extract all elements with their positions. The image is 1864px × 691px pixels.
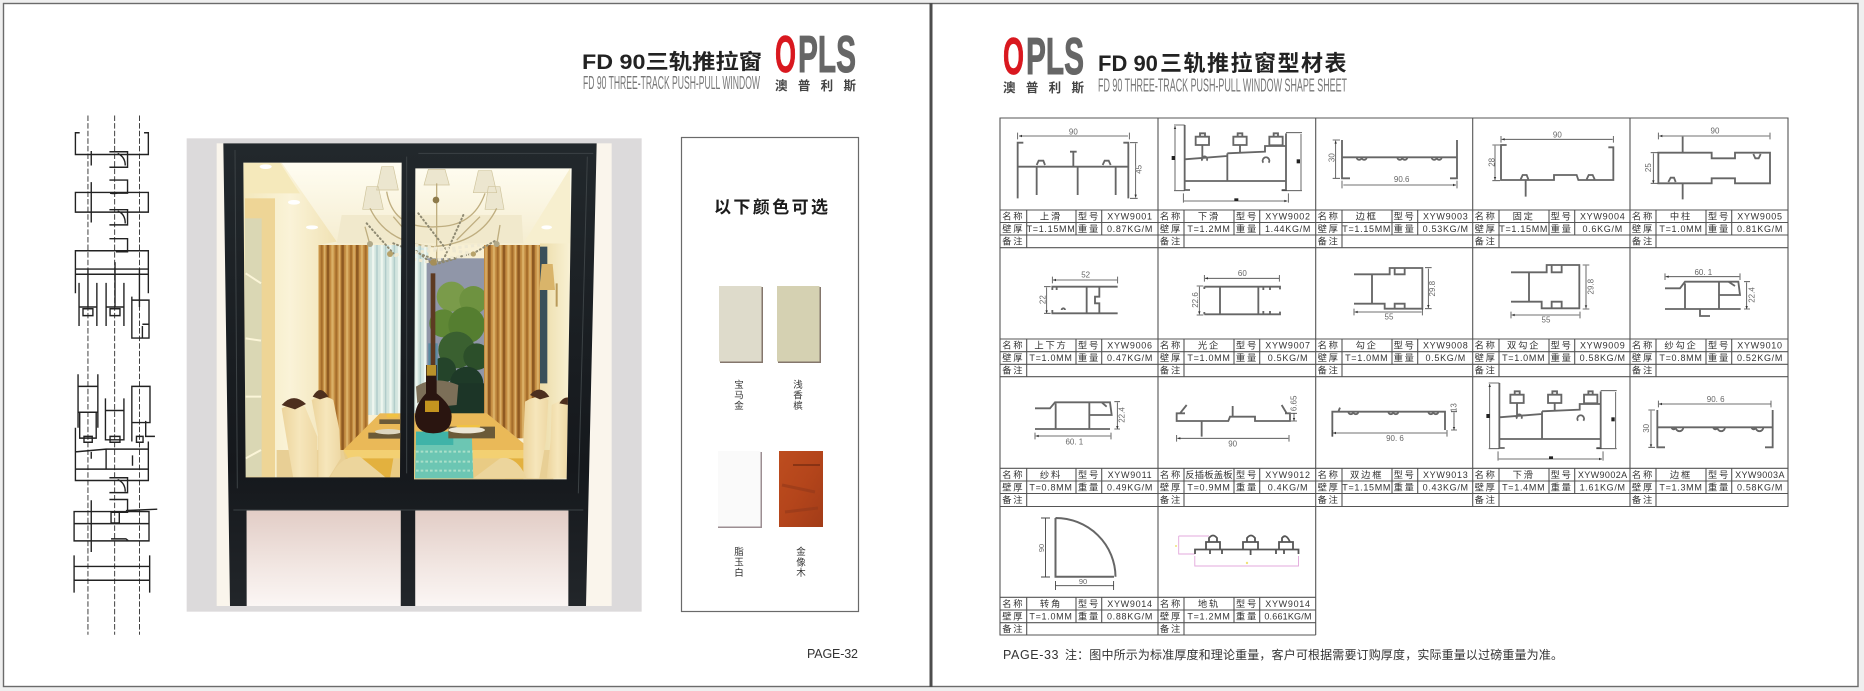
profile info: XYW9008: 壁厚 [1318, 352, 1340, 363]
profile info: XYW9012: 0.4KG/M [1268, 482, 1308, 492]
logo: OPLS right page: 澳普利斯 [1003, 80, 1084, 95]
profile info: XYW9003: 重量 [1394, 223, 1416, 234]
profile info: XYW9007: 重量 [1236, 352, 1258, 363]
logo: OPLS right page: O [1003, 28, 1024, 86]
profile drawing: XYW9007 [1191, 269, 1280, 315]
profile info: XYW9011: 壁厚 [1002, 481, 1024, 492]
profile info: XYW9005: T=1.0MM [1659, 224, 1703, 234]
profile info: XYW9001: 型号 [1078, 212, 1100, 222]
logo: OPLS left page: PLS [798, 26, 856, 84]
swatch: 浅香槟: 浅 [793, 379, 803, 391]
profile info: XYW9009: 双勾企 [1507, 340, 1540, 350]
profile info: XYW9006: 0.47KG/M [1107, 353, 1153, 363]
profile drawing: XYW9014 floor rail [1175, 536, 1298, 566]
profile info: XYW9014 floor rail: 0.661KG/M [1264, 611, 1312, 621]
profile info: XYW9014 floor rail: 名称 [1160, 598, 1182, 609]
swatch: 脂玉白: 白 [734, 567, 744, 579]
profile info: XYW9011: 纱料 [1040, 469, 1062, 480]
swatch: 金像木 [779, 451, 823, 579]
profile drawing: XYW9003A [1642, 395, 1773, 447]
profile info: XYW9011: T=0.8MM [1029, 482, 1073, 492]
profile info: XYW9002A: 型号 [1551, 470, 1573, 480]
profile info: XYW9008: 勾企 [1356, 340, 1378, 350]
swatch: 宝马金: 马 [734, 390, 744, 402]
profile drawing: XYW9008: 29.8 [1428, 280, 1437, 296]
profile info: XYW9006: 名称 [1002, 340, 1024, 350]
profile info: XYW9014 floor rail: 型号 [1236, 599, 1258, 609]
profile info: XYW9014 corner: 型号 [1078, 599, 1100, 609]
profile info: XYW9009: 0.58KG/M [1580, 353, 1626, 363]
logo: OPLS right page [1003, 28, 1084, 95]
profile info: XYW9007: T=1.0MM [1187, 353, 1231, 363]
profile info: XYW9013: 重量 [1394, 481, 1416, 492]
photo backdrop [187, 138, 642, 612]
profile drawing: XYW9005: 25 [1644, 163, 1653, 172]
profile info: XYW9014 corner: 0.88KG/M [1107, 611, 1153, 621]
profile info: XYW9005: 型号 [1708, 212, 1730, 222]
profile info: XYW9010: 备注 [1632, 364, 1654, 376]
profile info: XYW9005: 0.81KG/M [1737, 224, 1783, 234]
swatch: 浅香槟 [777, 286, 821, 412]
profile info: XYW9001 [1002, 210, 1153, 246]
profile info: XYW9002 [1160, 210, 1311, 246]
profile drawing: XYW9014 corner [1037, 518, 1116, 590]
swatch: 金像木: 像 [796, 556, 806, 568]
swatch: 脂玉白 [718, 451, 762, 579]
profile info: XYW9006: T=1.0MM [1029, 353, 1073, 363]
profile info: XYW9008: XYW9008 [1423, 340, 1468, 350]
profile drawing: XYW9013 [1332, 403, 1459, 443]
profile info: XYW9009: 重量 [1551, 352, 1573, 363]
window photo [187, 138, 642, 612]
profile info: XYW9011: XYW9011 [1108, 470, 1152, 480]
profile info: XYW9013: XYW9013 [1423, 470, 1468, 480]
profile drawing: XYW9006: 22 [1039, 295, 1048, 304]
chairs [282, 405, 317, 478]
profile drawing: XYW9006 [1039, 271, 1118, 313]
profile info: XYW9001: 上滑 [1040, 212, 1062, 222]
profile info: XYW9003A: XYW9003A [1735, 470, 1785, 480]
profile info: XYW9014 floor rail [1160, 598, 1312, 634]
profile info: XYW9005: 中柱 [1670, 210, 1692, 222]
profile info: XYW9002A [1475, 469, 1628, 505]
profile info: XYW9003: 型号 [1394, 212, 1416, 222]
swatch: 浅香槟: 槟 [793, 400, 803, 412]
logo: OPLS right page: PLS [1026, 28, 1084, 86]
spandrel panels [247, 511, 401, 606]
profile info: XYW9003: 备注 [1318, 236, 1340, 246]
title: FD 90三轨推拉窗 [582, 50, 762, 74]
profile info: XYW9004: 重量 [1551, 223, 1573, 234]
profile drawing: XYW9002A [1486, 383, 1617, 461]
profile drawing: XYW9008 [1354, 268, 1437, 321]
profile drawing: XYW9004: 28 [1487, 157, 1496, 167]
profile drawing: XYW9002 [1172, 125, 1302, 203]
profile info: XYW9002A: 名称 [1475, 469, 1497, 480]
swatch: 宝马金: 金 [734, 400, 744, 412]
profile info: XYW9011: 0.49KG/M [1107, 482, 1153, 492]
profile info: XYW9006: 备注 [1002, 364, 1024, 376]
window frame [223, 143, 597, 606]
profile info: XYW9001: T=1.15MM [1027, 224, 1075, 234]
profile info: XYW9002A: 备注 [1475, 494, 1497, 505]
profile info: XYW9014 floor rail: T=1.2MM [1187, 611, 1231, 621]
profile info: XYW9009 [1475, 340, 1626, 376]
profile drawing: XYW9013: 90. 6 [1386, 434, 1404, 443]
profile info: XYW9011: 备注 [1002, 494, 1024, 505]
profile drawing: XYW9001 [1018, 128, 1144, 198]
logo: OPLS left page: O [775, 26, 796, 84]
profile info: XYW9013: 双边框 [1350, 469, 1383, 480]
profile info: XYW9003A: 0.58KG/M [1737, 482, 1783, 492]
profile info: XYW9002: 1.44KG/M [1265, 224, 1311, 234]
left page header [582, 50, 762, 93]
profile info: XYW9014 corner: 名称 [1002, 598, 1024, 609]
profile info: XYW9012: 重量 [1236, 481, 1258, 492]
profile info: XYW9011 [1002, 469, 1153, 505]
logo: OPLS left page [775, 26, 856, 93]
profile info: XYW9002: 下滑 [1198, 212, 1220, 222]
profile info: XYW9005 [1632, 210, 1783, 246]
profile info: XYW9002: 名称 [1160, 210, 1182, 222]
colour heading: 以下颜色可选 [714, 197, 830, 217]
profile drawing: XYW9001: 90 [1069, 128, 1078, 137]
profile info: XYW9010: 0.52KG/M [1737, 353, 1783, 363]
profile info: XYW9002A: 1.61KG/M [1580, 482, 1626, 492]
profile info: XYW9004: 名称 [1475, 210, 1497, 222]
profile info: XYW9003A: 壁厚 [1632, 481, 1654, 492]
profile info: XYW9010: 壁厚 [1632, 352, 1654, 363]
profile info: XYW9008: 备注 [1318, 364, 1340, 376]
profile info: XYW9014 floor rail: 备注 [1160, 623, 1182, 634]
profile info: XYW9002: 型号 [1236, 212, 1258, 222]
profile info: XYW9003A: T=1.3MM [1659, 482, 1703, 492]
profile info: XYW9008: 型号 [1394, 340, 1416, 350]
profile info: XYW9002: 重量 [1236, 223, 1258, 234]
profile info: XYW9008: 0.5KG/M [1425, 353, 1466, 363]
profile drawing: XYW9003A: 90. 6 [1707, 395, 1725, 404]
profile info: XYW9004: XYW9004 [1580, 212, 1625, 222]
profile info: XYW9013: 壁厚 [1318, 481, 1340, 492]
profile info: XYW9014 floor rail: XYW9014 [1265, 599, 1311, 609]
profile drawing: XYW9005 [1644, 126, 1770, 199]
profile info: XYW9005: 名称 [1632, 210, 1654, 222]
profile info: XYW9010: 重量 [1708, 352, 1730, 363]
panel: colour options [682, 138, 858, 612]
profile info: XYW9002A: 壁厚 [1475, 481, 1497, 492]
profile info: XYW9005: 备注 [1632, 236, 1654, 246]
profile info: XYW9011: 名称 [1002, 469, 1024, 480]
flowers and wine bottle [416, 380, 458, 407]
profile info: XYW9005: 壁厚 [1632, 223, 1654, 234]
profile info: XYW9009: T=1.0MM [1502, 353, 1545, 363]
profile drawing: XYW9013: 13 [1450, 403, 1459, 412]
profile info: XYW9012: T=0.9MM [1187, 482, 1231, 492]
profile info: XYW9010 [1632, 340, 1783, 376]
profile info: XYW9010: T=0.8MM [1659, 353, 1703, 363]
profile info: XYW9004: T=1.15MM [1499, 224, 1548, 234]
profile info: XYW9006: 上下方 [1034, 340, 1068, 350]
profile info: XYW9014 floor rail: 重量 [1236, 610, 1258, 621]
profile info: XYW9006: XYW9006 [1107, 340, 1153, 350]
profile info: XYW9003: XYW9003 [1423, 212, 1468, 222]
profile info: XYW9009: 型号 [1551, 340, 1573, 350]
profile info: XYW9008: 名称 [1318, 340, 1340, 350]
profile info: XYW9010: 纱勾企 [1664, 340, 1698, 350]
profile info: XYW9002A: 重量 [1551, 481, 1573, 492]
profile drawing: XYW9010: 22.4 [1747, 287, 1756, 303]
profile info: XYW9001: 0.87KG/M [1107, 224, 1153, 234]
profile info: XYW9004: 0.6KG/M [1582, 224, 1623, 234]
profile info: XYW9004: 壁厚 [1475, 223, 1497, 234]
profile info: XYW9008 [1318, 340, 1468, 376]
profile drawing: XYW9011: 22.4 [1118, 407, 1127, 423]
profile info: XYW9013: T=1.15MM [1342, 482, 1391, 492]
profile info: XYW9002A: 下滑 [1513, 470, 1535, 480]
profile info: XYW9007: 0.5KG/M [1268, 353, 1308, 363]
profile table grid [1000, 118, 1788, 635]
profile info: XYW9001: XYW9001 [1107, 212, 1153, 222]
profile info: XYW9002A: XYW9002A [1578, 470, 1628, 480]
profile info: XYW9010: 型号 [1708, 340, 1730, 350]
profile info: XYW9006: 壁厚 [1002, 352, 1024, 363]
profile drawing: XYW9012: 6.65 [1290, 395, 1299, 411]
profile drawing: XYW9009: 29.8 [1586, 278, 1595, 294]
profile info: XYW9002: T=1.2MM [1187, 224, 1231, 234]
profile drawing: XYW9005: 90 [1711, 126, 1720, 135]
profile info: XYW9007: 壁厚 [1160, 352, 1182, 363]
profile info: XYW9004: 型号 [1551, 212, 1573, 222]
page number 33: PAGE-33 [1003, 648, 1059, 662]
profile drawing: XYW9011 [1035, 402, 1127, 446]
profile info: XYW9001: 壁厚 [1002, 223, 1024, 234]
profile info: XYW9013: 备注 [1318, 494, 1340, 505]
profile info: XYW9013: 0.43KG/M [1423, 482, 1469, 492]
swatch: 宝马金: 宝 [734, 379, 744, 391]
profile info: XYW9003: 名称 [1318, 210, 1340, 222]
swatch: 金像木: 金 [796, 546, 806, 558]
profile info: XYW9005: 重量 [1708, 223, 1730, 234]
profile info: XYW9005: XYW9005 [1737, 212, 1783, 222]
profile info: XYW9001: 名称 [1002, 210, 1024, 222]
profile drawing: XYW9001: 45 [1135, 164, 1144, 174]
profile info: XYW9014 corner: T=1.0MM [1029, 611, 1073, 621]
profile info: XYW9014 floor rail: 壁厚 [1160, 610, 1182, 621]
profile info: XYW9007: XYW9007 [1265, 340, 1311, 350]
logo: OPLS left page: 澳普利斯 [775, 78, 856, 93]
profile info: XYW9007: 光企 [1198, 340, 1220, 350]
profile drawing: XYW9011: 60. 1 [1065, 437, 1084, 446]
profile info: XYW9002: 壁厚 [1160, 223, 1182, 234]
profile drawing: XYW9010: 60. 1 [1694, 268, 1713, 277]
profile info: XYW9013: 名称 [1318, 469, 1340, 480]
profile drawing: XYW9007: 22.6 [1191, 292, 1200, 308]
profile drawing: XYW9012 [1177, 395, 1299, 449]
profile info: XYW9010: XYW9010 [1737, 340, 1783, 350]
profile info: XYW9003A: 重量 [1708, 481, 1730, 492]
profile drawing: XYW9003: 30 [1328, 153, 1337, 162]
profile drawing: XYW9008: 55 [1385, 312, 1394, 321]
profile info: XYW9004: 固定 [1513, 210, 1535, 222]
profile info: XYW9012: 名称 [1160, 469, 1182, 480]
profile info: XYW9003A: 型号 [1708, 470, 1730, 480]
profile info: XYW9003: T=1.15MM [1342, 224, 1391, 234]
floor behind furniture [277, 450, 553, 480]
profile drawing: XYW9004: 90 [1553, 130, 1562, 139]
profile drawing: XYW9014 corner: 90 [1079, 577, 1087, 586]
profile info: XYW9003: 壁厚 [1318, 223, 1340, 234]
profile info: XYW9003A [1632, 469, 1785, 505]
profile info: XYW9012: 型号 [1236, 470, 1258, 480]
swatch: 宝马金 [719, 286, 763, 412]
profile info: XYW9011: 型号 [1078, 470, 1100, 480]
profile info: XYW9014 corner: 转角 [1040, 598, 1062, 609]
profile info: XYW9007: 备注 [1160, 364, 1182, 376]
profile info: XYW9003: 边框 [1356, 210, 1378, 222]
profile info: XYW9006: 型号 [1078, 340, 1100, 350]
profile info: XYW9009: XYW9009 [1580, 340, 1625, 350]
swatch: 金像木: 木 [796, 567, 806, 579]
profile drawing: XYW9003A: 30 [1642, 423, 1651, 433]
profile drawing: XYW9009: 55 [1542, 316, 1551, 325]
text: FD 90 THREE-TRACK PUSH-PULL WINDOW SHAPE SHEET [1098, 76, 1347, 96]
profile info: XYW9001: 重量 [1078, 223, 1100, 234]
profile info: XYW9014 floor rail: 地轨 [1198, 598, 1220, 609]
text: FD 90 THREE-TRACK PUSH-PULL WINDOW [583, 73, 760, 93]
chandelier [363, 167, 504, 266]
profile info: XYW9014 corner: XYW9014 [1107, 599, 1153, 609]
interior scene [243, 163, 572, 480]
profile info: XYW9002A: T=1.4MM [1502, 482, 1545, 492]
profile info: XYW9009: 名称 [1475, 340, 1497, 350]
profile info: XYW9014 corner: 壁厚 [1002, 610, 1024, 621]
profile info: XYW9014 corner: 备注 [1002, 623, 1024, 634]
profile info: XYW9003A: 边框 [1670, 469, 1692, 480]
garden tree [428, 273, 490, 415]
profile info: XYW9002: 备注 [1160, 236, 1182, 246]
profile info: XYW9009: 壁厚 [1475, 352, 1497, 363]
swatch: 脂玉白: 玉 [734, 558, 744, 568]
profile drawing: XYW9010 [1665, 268, 1756, 316]
profile info: XYW9003 [1318, 210, 1469, 246]
swatch: 浅香槟: 香 [793, 390, 803, 402]
profile info: XYW9014 corner: 重量 [1078, 610, 1100, 621]
profile info: XYW9003: 0.53KG/M [1423, 224, 1469, 234]
profile drawing: XYW9009 [1511, 265, 1595, 325]
profile info: XYW9009: 备注 [1475, 364, 1497, 376]
profile info: XYW9013: 型号 [1394, 470, 1416, 480]
profile info: XYW9008: T=1.0MM [1345, 353, 1388, 363]
profile info: XYW9007: 型号 [1236, 340, 1258, 350]
dining table [343, 413, 532, 479]
swatch: 脂玉白: 脂 [734, 546, 744, 558]
profile drawing: XYW9012: 90 [1228, 440, 1238, 449]
sheet title: 三轨推拉窗型材表 [1160, 51, 1348, 76]
profile info: XYW9012: 壁厚 [1160, 481, 1182, 492]
profile info: XYW9004 [1475, 210, 1625, 246]
profile info: XYW9001: 备注 [1002, 236, 1024, 246]
profile info: XYW9013 [1318, 469, 1469, 505]
profile info: XYW9008: 重量 [1394, 352, 1416, 363]
profile info: XYW9002: XYW9002 [1265, 212, 1311, 222]
technical section drawing [74, 116, 157, 635]
profile info: XYW9003A: 名称 [1632, 469, 1654, 480]
profile info: XYW9012: 备注 [1160, 494, 1182, 505]
page number 32: PAGE-32 [807, 647, 858, 661]
profile info: XYW9011: 重量 [1078, 481, 1100, 492]
profile info: XYW9014 corner [1002, 598, 1153, 634]
profile drawing: XYW9007: 60 [1238, 269, 1247, 278]
profile info: XYW9012 [1160, 469, 1311, 505]
recessed lights [260, 164, 272, 169]
profile drawing: XYW9004 [1487, 130, 1613, 197]
profile info: XYW9012: 反插板盖板 [1185, 469, 1233, 480]
profile drawing: XYW9006: 52 [1081, 271, 1091, 280]
profile info: XYW9012: XYW9012 [1265, 470, 1311, 480]
profile info: XYW9007 [1160, 340, 1311, 376]
footnote: 注：图中所示为标准厚度和理论重量，客户可根据需要订购厚度，实际重量以过磅重量为准。 [1065, 647, 1563, 662]
profile info: XYW9004: 备注 [1475, 236, 1497, 246]
right page header [1098, 51, 1348, 96]
profile drawing: XYW9003 [1328, 140, 1457, 188]
profile drawing: XYW9003: 90.6 [1394, 175, 1410, 184]
profile info: XYW9007: 名称 [1160, 340, 1182, 350]
profile info: XYW9006: 重量 [1078, 352, 1100, 363]
profile info: XYW9006 [1002, 340, 1153, 376]
sheet title: FD 90 [1098, 51, 1158, 76]
profile info: XYW9010: 名称 [1632, 340, 1654, 350]
profile info: XYW9003A: 备注 [1632, 494, 1654, 505]
profile drawing: XYW9014 corner: 90 [1037, 544, 1046, 552]
